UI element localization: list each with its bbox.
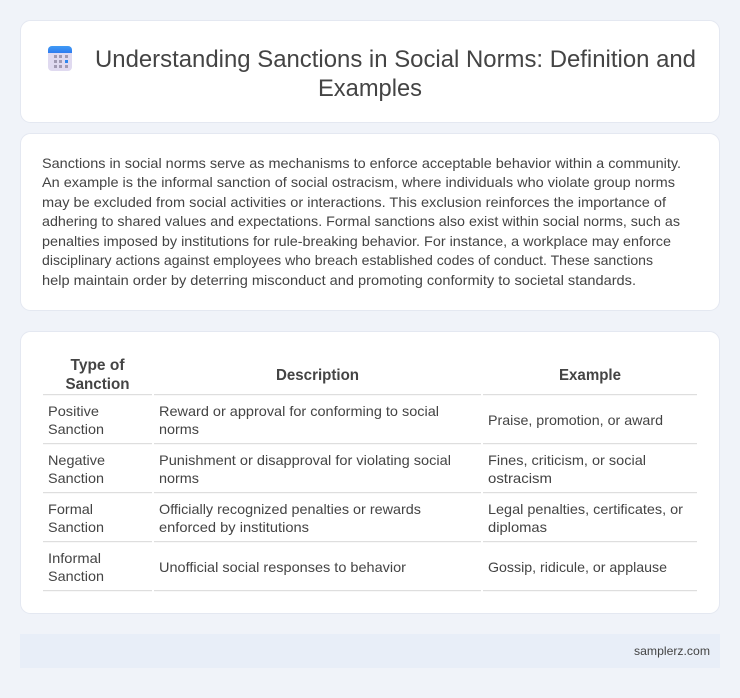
title: Examples (318, 75, 422, 102)
row: formal sanction: Formal (48, 501, 93, 517)
panel: introduction text (20, 134, 720, 310)
row: formal sanction: Officially recognized penalties or rewards (159, 501, 421, 517)
icon: calendar (48, 46, 72, 71)
paragraph: disciplinary actions against employees who breach established codes of conduct. These sanctions (42, 252, 653, 268)
row: negative sanction: norms (159, 470, 199, 486)
row: formal sanction: Sanction (48, 519, 104, 535)
table header (66, 357, 621, 393)
footer bar (20, 634, 720, 668)
row: positive sanction: Reward or approval for conforming to social (159, 403, 439, 419)
row: positive sanction: Praise, promotion, or award (488, 412, 663, 428)
paragraph: Sanctions in social norms serve as mechanisms to enforce acceptable behavior within a community. (42, 155, 681, 171)
row: formal sanction: diplomas (488, 519, 547, 535)
row: informal sanction: Gossip, ridicule, or applause (488, 559, 667, 575)
table header: Description (276, 367, 359, 384)
row: negative sanction: Fines, criticism, or social (488, 452, 646, 468)
row: positive sanction: norms (159, 421, 199, 437)
row: informal sanction: Informal (48, 550, 101, 566)
row: informal sanction: Unofficial social responses to behavior (159, 559, 406, 575)
row: negative sanction: ostracism (488, 470, 552, 486)
paragraph: penalties imposed by institutions for rule-breaking behavior. For instance, a workplace may enforce (42, 233, 671, 249)
paragraph: may be excluded from social activities or interactions. This exclusion reinforces the importance of (42, 194, 666, 210)
row: positive sanction: Positive (48, 403, 99, 419)
row: negative sanction: Punishment or disapproval for violating social (159, 452, 451, 468)
row: positive sanction (48, 403, 663, 437)
row: negative sanction: Negative (48, 452, 105, 468)
panel: sanctions table (20, 332, 720, 614)
paragraph: An example is the informal sanction of social ostracism, where individuals who violate group norms (42, 174, 675, 190)
row: informal sanction: Sanction (48, 568, 104, 584)
row: formal sanction: Legal penalties, certificates, or (488, 501, 683, 517)
table header: Type of (70, 357, 125, 374)
row: formal sanction: enforced by institutions (159, 519, 309, 535)
paragraph: help maintain order by deterring misconduct and promoting conformity to societal standards. (42, 272, 636, 288)
row: negative sanction (48, 452, 646, 486)
table header: Example (559, 367, 621, 384)
row: negative sanction: Sanction (48, 470, 104, 486)
footer text: samplerz.com (634, 644, 710, 658)
row: positive sanction: Sanction (48, 421, 104, 437)
panel: title header (20, 20, 720, 122)
title: Understanding Sanctions in Social Norms: Definition and (95, 46, 696, 73)
row: informal sanction (48, 550, 667, 584)
row: formal sanction (48, 501, 683, 535)
title (95, 46, 696, 102)
table header: Sanction (66, 376, 130, 393)
paragraph (42, 155, 681, 288)
paragraph: adhering to shared values and expectations. Formal sanctions also exist within social norms, such as (42, 213, 680, 229)
